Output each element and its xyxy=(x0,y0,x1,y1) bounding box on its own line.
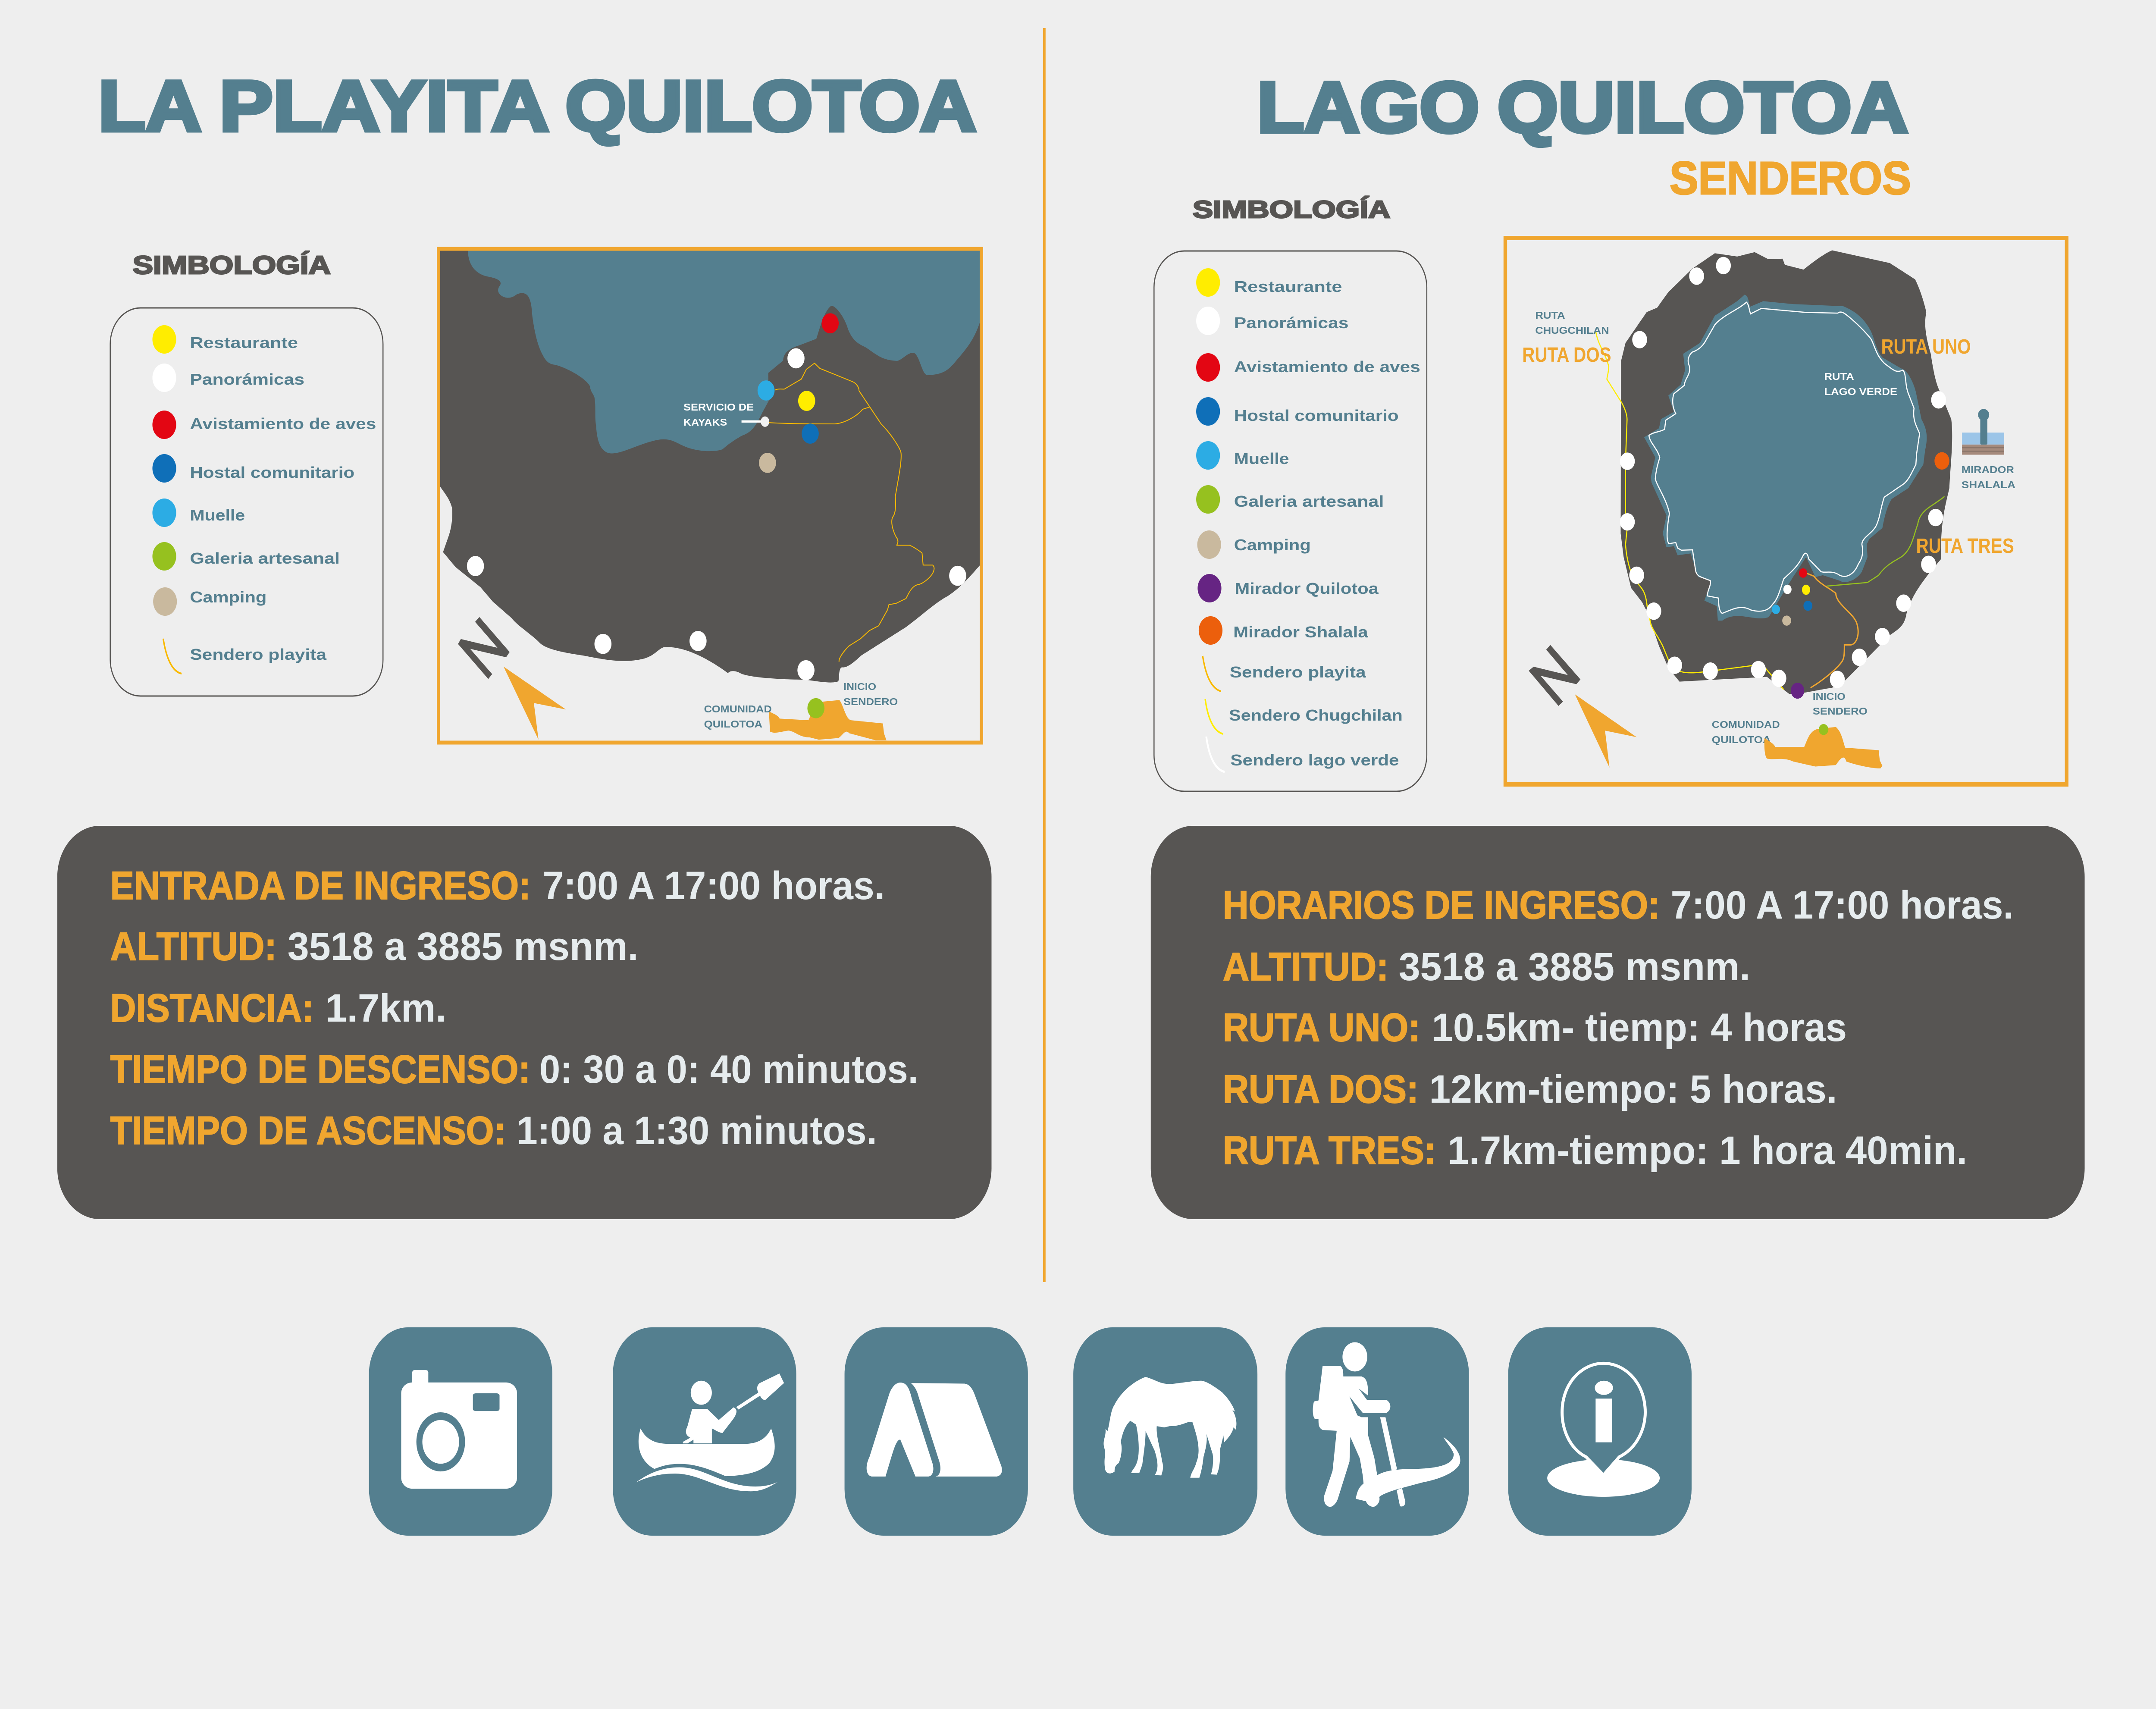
legend item: avistamiento de aves xyxy=(1196,353,1420,382)
label: inicio sendero: SENDERO xyxy=(1813,706,1868,717)
divider line xyxy=(1043,28,1046,1282)
label: mirador shalala: SHALALA xyxy=(1962,480,2015,490)
label: mirador shalala xyxy=(1962,464,2015,490)
legend item: panoramicas xyxy=(152,364,304,392)
legend item: hostal comunitario: Hostal comunitario xyxy=(190,464,354,482)
legend item: sendero playita xyxy=(163,639,327,674)
info line: descenso: TIEMPO DE DESCENSO: xyxy=(110,1047,530,1091)
info line: ruta uno xyxy=(1223,1005,1847,1050)
legend item: mirador shalala: Mirador Shalala xyxy=(1233,624,1368,641)
legend item: muelle xyxy=(1196,441,1289,470)
icon: kayak xyxy=(613,1327,796,1536)
info line: ruta dos: 12km-tiempo: 5 horas. xyxy=(1429,1066,1837,1111)
legend item: muelle xyxy=(152,499,245,527)
info line: horarios xyxy=(1223,882,2014,927)
arrow: north xyxy=(1575,694,1637,768)
legend item: panoramicas: Panorámicas xyxy=(1234,315,1349,332)
legend item: galeria artesanal xyxy=(152,542,340,571)
map frame xyxy=(439,249,981,743)
legend item: sendero lago verde: Sendero lago verde xyxy=(1230,752,1399,769)
panel: legend right xyxy=(1154,251,1427,791)
legend item: camping: Camping xyxy=(1234,537,1311,554)
icon: camera xyxy=(369,1327,552,1536)
label: comunidad quilotoa xyxy=(704,704,772,730)
info line: ruta uno: 10.5km- tiemp: 4 horas xyxy=(1432,1005,1847,1050)
legend item: sendero chugchilan xyxy=(1205,699,1403,734)
legend item: sendero playita: Sendero playita xyxy=(1230,664,1366,681)
trail: sendero playita xyxy=(1807,574,1858,688)
title: Lago Quilotoa: QUILOTOA xyxy=(1498,68,1908,147)
crater lake xyxy=(1644,295,1927,621)
info line: descenso xyxy=(110,1047,918,1091)
info line: ruta dos xyxy=(1223,1066,1837,1111)
label: ruta uno: RUTA UNO xyxy=(1881,336,1971,358)
legend item: galeria artesanal: Galeria artesanal xyxy=(190,550,340,568)
info line: altitud: ALTITUD: xyxy=(1223,944,1388,989)
label: mirador shalala: MIRADOR xyxy=(1962,464,2014,475)
label: ruta lago verde: LAGO VERDE xyxy=(1824,386,1897,397)
title: La Playita Quilotoa: QUILOTOA xyxy=(565,66,976,146)
legend item: sendero playita xyxy=(1203,656,1366,691)
subtitle: Senderos: SENDEROS xyxy=(1670,152,1911,204)
shape: comunidad xyxy=(769,700,887,740)
title: La Playita Quilotoa: LA xyxy=(98,66,201,146)
legend item: panoramicas: Panorámicas xyxy=(190,371,304,389)
map markers xyxy=(467,313,966,680)
panel: info lago xyxy=(1151,826,2085,1219)
arrow: north xyxy=(504,667,566,740)
shape: comunidad xyxy=(1764,724,1882,768)
info line: horarios: HORARIOS DE INGRESO: xyxy=(1223,882,1660,927)
trail: sendero chugchilan xyxy=(1596,331,1784,690)
label: comunidad quilotoa: COMUNIDAD xyxy=(1712,719,1780,730)
legend item: hostal comunitario xyxy=(152,454,354,483)
title: Lago Quilotoa xyxy=(1257,68,1908,147)
label: inicio sendero: INICIO xyxy=(1813,691,1846,702)
legend item: avistamiento de aves xyxy=(152,411,376,439)
info line: descenso: 0: 30 a 0: 40 minutos. xyxy=(539,1047,918,1091)
icon: mirador shalala xyxy=(1962,409,2004,455)
legend item: avistamiento de aves: Avistamiento de aves xyxy=(1234,359,1420,376)
label: servicio de kayaks: SERVICIO DE xyxy=(683,402,754,413)
label: ruta lago verde: RUTA xyxy=(1824,371,1854,382)
info line: entrada: 7:00 A 17:00 horas. xyxy=(542,863,885,908)
info line: ascenso: TIEMPO DE ASCENSO: xyxy=(110,1108,506,1153)
label: inicio sendero xyxy=(843,681,898,707)
info line: horarios: 7:00 A 17:00 horas. xyxy=(1670,882,2014,927)
title: La Playita Quilotoa xyxy=(98,66,976,146)
info line: ruta tres: 1.7km-tiempo: 1 hora 40min. xyxy=(1448,1128,1967,1173)
info line: distancia xyxy=(110,985,446,1030)
legend item: camping xyxy=(153,587,266,616)
marker: galeria xyxy=(807,698,824,718)
label: comunidad quilotoa: QUILOTOA xyxy=(704,719,762,730)
legend item: galeria artesanal: Galeria artesanal xyxy=(1234,493,1384,511)
title: Lago Quilotoa: LAGO xyxy=(1257,68,1479,147)
heading: Simbología left: SIMBOLOGÍA xyxy=(132,251,331,279)
icon: hiker xyxy=(1285,1327,1469,1536)
info line: ascenso: 1:00 a 1:30 minutos. xyxy=(517,1108,877,1153)
info line: ruta tres: RUTA TRES: xyxy=(1223,1128,1436,1173)
legend item: restaurante: Restaurante xyxy=(190,335,298,352)
legend item: mirador shalala xyxy=(1199,616,1368,645)
label: inicio sendero xyxy=(1813,691,1868,717)
map: Lago Quilotoa xyxy=(1505,238,2067,784)
info line: altitud xyxy=(110,924,639,969)
icon: north letter xyxy=(1529,645,1580,706)
heading: Simbología right: SIMBOLOGÍA xyxy=(1193,196,1390,223)
legend item: mirador quilotoa xyxy=(1197,574,1379,602)
label: inicio sendero: SENDERO xyxy=(843,696,898,707)
icon: information pin xyxy=(1508,1327,1692,1536)
legend item: camping: Camping xyxy=(190,589,266,606)
legend item: muelle: Muelle xyxy=(1234,451,1289,468)
panel: legend left xyxy=(110,308,383,696)
icon: horse xyxy=(1073,1327,1257,1536)
icon: tent xyxy=(845,1327,1028,1536)
legend item: hostal comunitario: Hostal comunitario xyxy=(1234,408,1399,425)
legend item: restaurante: Restaurante xyxy=(1234,279,1342,296)
title: La Playita Quilotoa: PLAYITA xyxy=(219,66,549,146)
legend item: panoramicas xyxy=(1196,307,1349,335)
info line: altitud: 3518 a 3885 msnm. xyxy=(1399,944,1750,989)
label: servicio de kayaks xyxy=(683,402,754,428)
trail: sendero lago verde xyxy=(1649,302,1920,613)
label: ruta dos: RUTA DOS xyxy=(1522,344,1611,367)
icon: north letter xyxy=(458,617,510,679)
info line: entrada: ENTRADA DE INGRESO: xyxy=(110,863,531,908)
label: comunidad quilotoa: COMUNIDAD xyxy=(704,704,772,715)
label: ruta chugchilan: RUTA xyxy=(1535,310,1565,321)
legend item: hostal comunitario xyxy=(1196,397,1399,426)
legend item: sendero playita: Sendero playita xyxy=(190,646,327,664)
label: ruta tres: RUTA TRES xyxy=(1916,535,2014,558)
info line: ruta dos: RUTA DOS: xyxy=(1223,1066,1419,1111)
legend item: sendero lago verde xyxy=(1206,737,1399,772)
info line: altitud xyxy=(1223,944,1750,989)
info line: distancia: DISTANCIA: xyxy=(110,985,314,1030)
legend item: sendero chugchilan: Sendero Chugchilan xyxy=(1229,707,1403,724)
info line: ascenso xyxy=(110,1108,877,1153)
crater land xyxy=(1621,251,1952,694)
label: ruta chugchilan xyxy=(1535,310,1609,336)
info line: distancia: 1.7km. xyxy=(326,985,446,1030)
info line: altitud: 3518 a 3885 msnm. xyxy=(288,924,639,969)
map land xyxy=(440,251,980,683)
legend item: avistamiento de aves: Avistamiento de aves xyxy=(190,416,376,433)
legend item: camping xyxy=(1197,530,1311,559)
info line: altitud: ALTITUD: xyxy=(110,924,277,969)
label: ruta chugchilan: CHUGCHILAN xyxy=(1535,325,1609,336)
map markers xyxy=(1620,257,1949,699)
legend item: restaurante xyxy=(1196,268,1342,297)
label: inicio sendero: INICIO xyxy=(843,681,876,692)
info line: ruta tres xyxy=(1223,1128,1967,1173)
panel: info playita xyxy=(57,826,991,1219)
trail: sendero playita xyxy=(769,363,934,662)
label: comunidad quilotoa xyxy=(1712,719,1780,745)
legend item: mirador quilotoa: Mirador Quilotoa xyxy=(1235,580,1379,598)
label: servicio de kayaks: KAYAKS xyxy=(683,417,727,428)
info line: ruta uno: RUTA UNO: xyxy=(1223,1005,1420,1050)
info line: entrada xyxy=(110,863,885,908)
legend item: restaurante xyxy=(152,325,298,354)
trail: ruta tres xyxy=(1827,496,1945,586)
map lake xyxy=(468,251,980,453)
legend item: galeria artesanal xyxy=(1196,485,1384,514)
map frame xyxy=(1505,238,2067,784)
label: ruta lago verde xyxy=(1824,371,1897,397)
map: La Playita xyxy=(439,249,981,743)
legend item: muelle: Muelle xyxy=(190,507,245,524)
label: comunidad quilotoa: QUILOTOA xyxy=(1712,734,1771,745)
